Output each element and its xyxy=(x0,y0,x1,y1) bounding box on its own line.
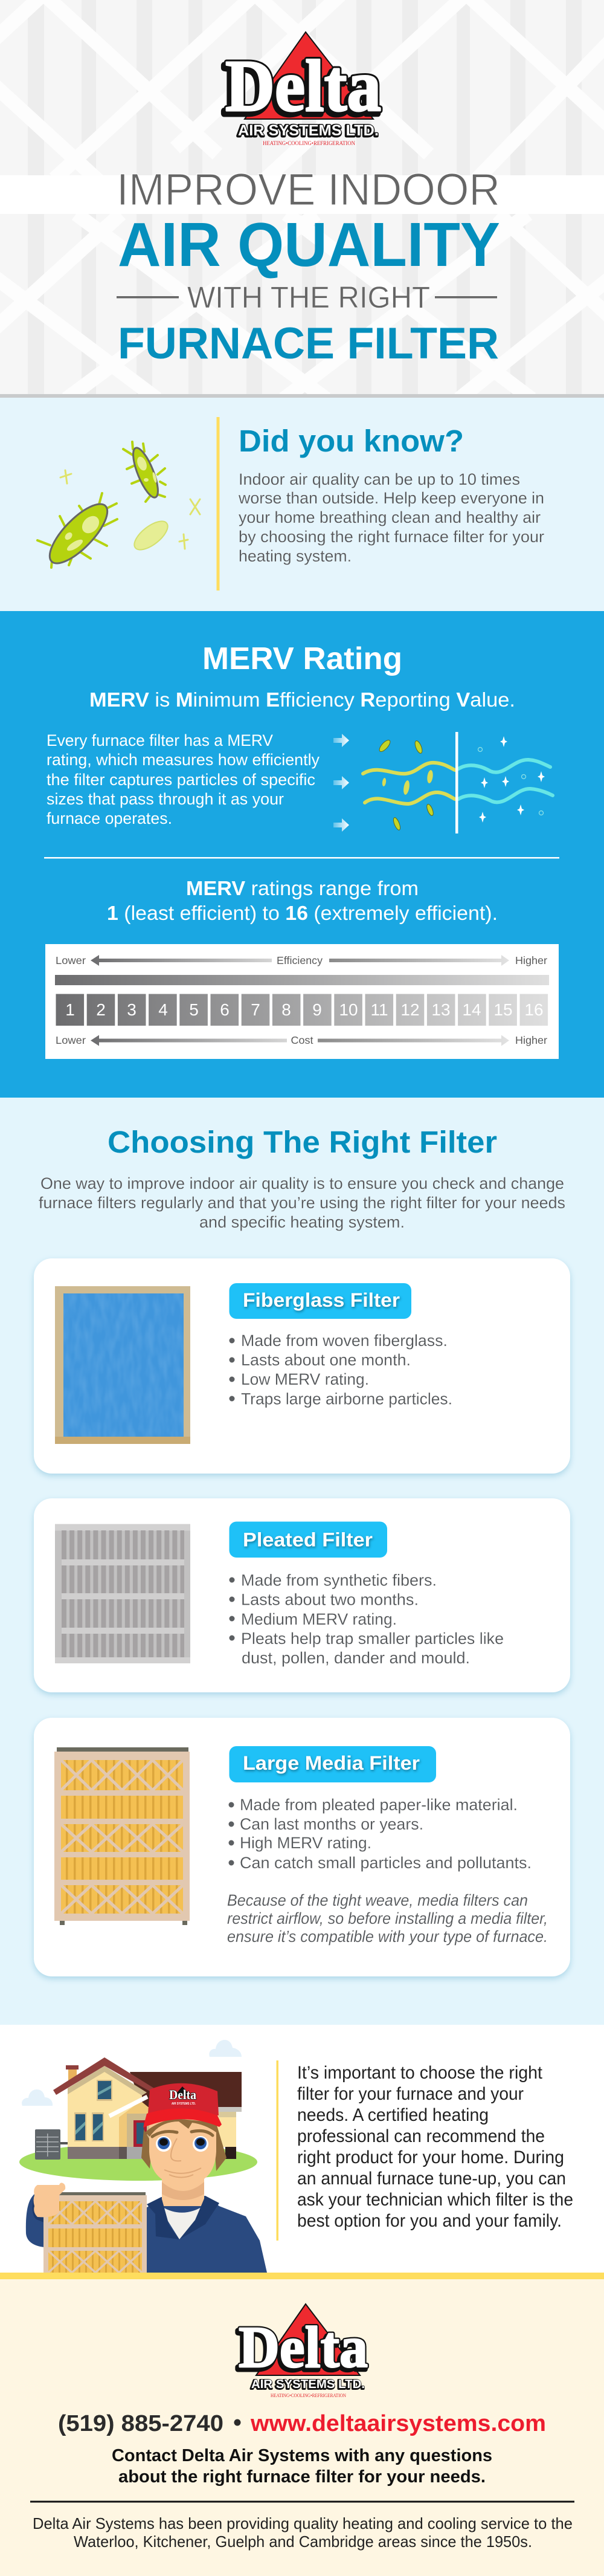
text block: MERV explanation: the filter captures particles of specific xyxy=(47,771,315,789)
number cells 1 to 16: 6 xyxy=(220,1000,230,1019)
text block: MERV explanation: furnace operates. xyxy=(47,809,172,827)
heading: MERV rating: MERV Rating xyxy=(202,641,402,676)
number cells 1 to 16 xyxy=(56,994,548,1026)
title xyxy=(117,164,500,368)
logo: Delta Air Systems: HEATING•COOLING•REFRIGERATION xyxy=(263,141,355,147)
text: MERV range: 1 (least efficient) to 16 (extremely efficient). xyxy=(107,902,498,924)
cost row: Lower xyxy=(56,1034,86,1046)
text block: advice xyxy=(297,2063,573,2231)
logo: Delta Air Systems: AIR SYSTEMS LTD. xyxy=(237,123,378,140)
panel: MERV rating xyxy=(0,611,604,1098)
text block: advice: needs. A certified heating xyxy=(297,2105,489,2125)
text block: advice: ask your technician which filter is the xyxy=(297,2190,573,2210)
title: WITH THE RIGHT xyxy=(187,280,430,314)
text block: advice: best option for you and your family. xyxy=(297,2211,562,2231)
efficiency row: Efficiency xyxy=(277,954,323,966)
chart: MERV scale xyxy=(45,944,559,1059)
text block: company note xyxy=(33,2514,573,2551)
heading: choosing the right filter: Choosing The Right Filter xyxy=(108,1125,497,1159)
text: MERV range: MERV ratings range from xyxy=(186,877,419,899)
logo: Delta Air Systems footer: Delta xyxy=(239,2315,368,2380)
text block: did you know: Indoor air quality can be up to 10 times xyxy=(239,470,520,488)
list: fiberglass filter: Made from woven fiberglass. xyxy=(241,1332,448,1350)
logo: Delta Air Systems xyxy=(223,32,381,147)
contact: phone and website: (519) 885-2740 xyxy=(58,2411,223,2436)
hat logo: AIR SYSTEMS LTD. xyxy=(172,2102,196,2106)
diagram: air passing through filter xyxy=(333,732,553,833)
list: fiberglass filter: Lasts about one month. xyxy=(241,1351,411,1369)
logo: Delta Air Systems footer: AIR SYSTEMS LTD. xyxy=(251,2378,364,2392)
efficiency row: Lower xyxy=(56,954,86,966)
list: pleated filter xyxy=(230,1571,504,1667)
text block: advice: filter for your furnace and your xyxy=(297,2084,524,2104)
text block: did you know xyxy=(238,470,544,565)
number cells 1 to 16: 12 xyxy=(400,1000,420,1019)
badge: fiberglass filter: Fiberglass Filter xyxy=(243,1289,400,1311)
text block: did you know: your home breathing clean and healthy air xyxy=(239,508,541,526)
number cells 1 to 16: 15 xyxy=(493,1000,513,1019)
text block: company note: Waterloo, Kitchener, Guelph and Cambridge areas since the 1950s. xyxy=(74,2532,532,2551)
number cells 1 to 16: 3 xyxy=(127,1000,137,1019)
logo: Delta Air Systems: Delta xyxy=(223,48,379,130)
number cells 1 to 16: 13 xyxy=(431,1000,451,1019)
title: AIR QUALITY xyxy=(118,210,500,279)
list: large media filter: High MERV rating. xyxy=(240,1834,371,1852)
card: pleated filter xyxy=(34,1498,570,1692)
badge: pleated filter: Pleated Filter xyxy=(243,1529,373,1551)
logo: Delta Air Systems footer: Delta xyxy=(237,2317,366,2383)
text block: did you know: worse than outside. Help keep everyone in xyxy=(238,489,544,507)
text block: advice: professional can recommend the xyxy=(297,2126,545,2146)
list: pleated filter: Pleats help trap smaller particles like xyxy=(241,1629,504,1648)
cost row: Cost xyxy=(291,1034,313,1046)
list: large media filter xyxy=(228,1796,532,1872)
note: media filter caution xyxy=(227,1891,548,1946)
number cells 1 to 16: 16 xyxy=(524,1000,544,1019)
text: MERV range xyxy=(107,877,498,924)
panel: footer xyxy=(0,2273,604,2576)
number cells 1 to 16: 11 xyxy=(370,1000,388,1019)
call to action xyxy=(112,2446,492,2487)
text block: intro: furnace filters regularly and that you’re using the right filter for your needs xyxy=(39,1194,565,1212)
number cells 1 to 16: 1 xyxy=(65,1000,75,1019)
note: media filter caution: Because of the tight weave, media filters can xyxy=(227,1891,528,1909)
list: fiberglass filter xyxy=(230,1332,452,1408)
hat logo: Delta xyxy=(169,2087,196,2102)
number cells 1 to 16: 2 xyxy=(96,1000,106,1019)
text block: MERV explanation xyxy=(47,731,320,827)
list: pleated filter: Lasts about two months. xyxy=(241,1591,419,1609)
filter held by technician xyxy=(43,2192,147,2273)
heading: did you know: Did you know? xyxy=(239,424,464,458)
panel: did you know xyxy=(0,398,604,611)
list: large media filter: Can last months or years. xyxy=(240,1815,423,1833)
call to action: Contact Delta Air Systems with any questions xyxy=(112,2446,492,2465)
contact: phone and website xyxy=(58,2411,546,2436)
logo: Delta Air Systems: Delta xyxy=(225,45,381,127)
panel: header background xyxy=(0,0,604,399)
badge: fiberglass filter xyxy=(230,1283,411,1319)
card: fiberglass filter xyxy=(34,1258,570,1474)
note: media filter caution: ensure it’s compatible with your type of furnace. xyxy=(227,1927,548,1946)
badge: large media filter xyxy=(230,1746,436,1782)
number cells 1 to 16: 8 xyxy=(281,1000,291,1019)
icon: media filter xyxy=(54,1747,190,1925)
note: media filter caution: restrict airflow, so before installing a media filter, xyxy=(227,1909,548,1927)
text block: did you know: heating system. xyxy=(239,547,352,565)
logo: Delta Air Systems footer: AIR SYSTEMS LTD. xyxy=(251,2378,365,2391)
icon: bacteria xyxy=(37,442,200,572)
text block: advice: an annual furnace tune-up, you can xyxy=(297,2169,566,2189)
title: FURNACE FILTER xyxy=(118,319,499,368)
logo: Delta Air Systems footer xyxy=(237,2304,368,2398)
efficiency row: Higher xyxy=(515,954,547,966)
cost row: Higher xyxy=(515,1034,547,1046)
panel: technician advice xyxy=(0,2025,604,2273)
illustration: technician holding filter xyxy=(26,2083,267,2273)
number cells 1 to 16: 5 xyxy=(189,1000,199,1019)
list: large media filter: Can catch small particles and pollutants. xyxy=(240,1854,532,1872)
text block: MERV explanation: Every furnace filter has a MERV xyxy=(47,731,273,749)
text block: MERV explanation: rating, which measures how efficiently xyxy=(47,751,320,769)
number cells 1 to 16: 10 xyxy=(339,1000,358,1019)
badge: pleated filter xyxy=(230,1522,387,1558)
card: large media filter xyxy=(34,1718,570,1976)
list: fiberglass filter: Traps large airborne particles. xyxy=(241,1390,452,1408)
illustration: house with lawn xyxy=(19,2040,257,2181)
icon: fiberglass filter xyxy=(55,1286,190,1444)
text block: did you know: by choosing the right furnace filter for your xyxy=(239,528,544,546)
contact: phone and website: www.deltaairsystems.com xyxy=(250,2411,546,2436)
text block: advice: It’s important to choose the right xyxy=(297,2063,543,2083)
list: pleated filter: dust, pollen, dander and mould. xyxy=(242,1649,470,1667)
panel: choosing the right filter xyxy=(0,1098,604,2025)
list: large media filter: Made from pleated paper-like material. xyxy=(240,1796,518,1814)
number cells 1 to 16: 4 xyxy=(158,1000,168,1019)
number cells 1 to 16: 7 xyxy=(251,1000,260,1019)
text block: MERV explanation: sizes that pass through it as your xyxy=(47,790,284,808)
logo: Delta Air Systems footer: HEATING•COOLING•REFRIGERATION xyxy=(271,2393,346,2398)
icon: pleated filter xyxy=(55,1524,190,1663)
call to action: about the right furnace filter for your needs. xyxy=(118,2467,486,2487)
cost row xyxy=(56,1034,547,1046)
list: pleated filter: Medium MERV rating. xyxy=(241,1610,397,1628)
number cells 1 to 16: 14 xyxy=(462,1000,481,1019)
text block: company note: Delta Air Systems has been providing quality heating and cooling service to the xyxy=(33,2514,573,2532)
text block: intro xyxy=(39,1174,565,1231)
list: pleated filter: Made from synthetic fibers. xyxy=(241,1571,437,1590)
logo: Delta Air Systems: Delta xyxy=(225,45,381,127)
logo: Delta Air Systems: AIR SYSTEMS LTD. xyxy=(238,122,379,139)
title: IMPROVE INDOOR xyxy=(117,164,500,215)
badge: large media filter: Large Media Filter xyxy=(243,1752,420,1774)
text block: intro: One way to improve indoor air quality is to ensure you check and change xyxy=(40,1174,564,1193)
efficiency row xyxy=(56,954,547,966)
text block: advice: right product for your home. During xyxy=(297,2147,564,2167)
logo: Delta Air Systems footer: Delta xyxy=(239,2315,368,2380)
text block: intro: and specific heating system. xyxy=(199,1213,405,1231)
list: fiberglass filter: Low MERV rating. xyxy=(241,1370,369,1388)
subtitle: MERV definition: MERV is Minimum Efficiency Reporting Value. xyxy=(89,688,515,711)
number cells 1 to 16: 9 xyxy=(312,1000,322,1019)
